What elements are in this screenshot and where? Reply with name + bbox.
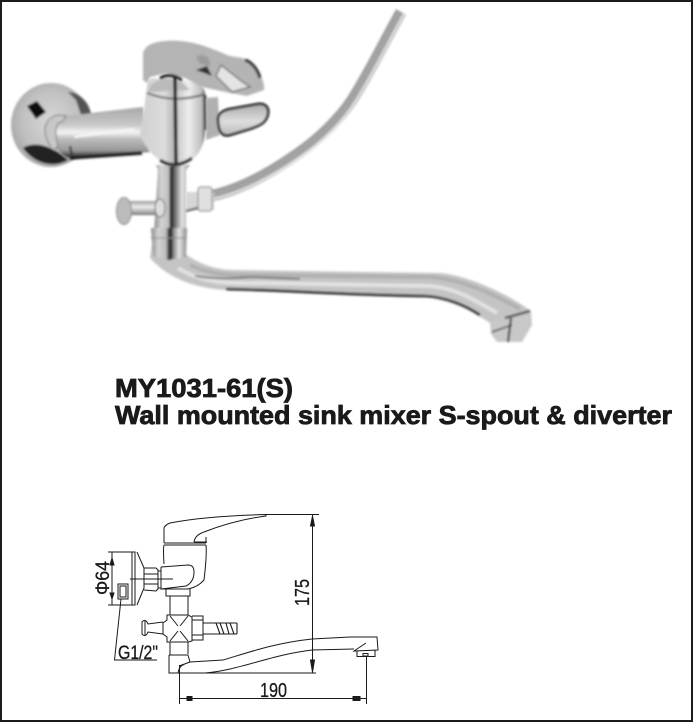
label: G1/2 thread: G1/2" [118, 643, 158, 664]
dimension: height 175 [266, 514, 319, 673]
wall flange [11, 83, 91, 167]
drawing: lever handle [164, 514, 266, 543]
drawing: G1/2 port [114, 584, 157, 660]
spout [150, 246, 532, 342]
drawing: spout elbow [169, 637, 378, 673]
faucet product photo [11, 12, 532, 342]
drawing: diverter cross [163, 615, 192, 642]
diverter column [151, 165, 190, 260]
drawing: thread hatching [214, 623, 237, 634]
dimension: diameter 64 [93, 552, 114, 605]
dimension label: 175: 175 [292, 579, 314, 606]
drawing: diverter knob [142, 620, 163, 636]
dimension label: Φ64: Φ64 [93, 561, 114, 595]
wall arm [45, 107, 150, 158]
drawing: aerator [357, 650, 375, 656]
lever handle [143, 41, 264, 96]
drawing: wall flange and nut [108, 552, 161, 605]
hose connector [186, 187, 214, 211]
drawing: centre line [130, 578, 173, 580]
shower hose [210, 12, 404, 199]
drawing: threaded connector [192, 616, 214, 640]
mixer body [140, 76, 206, 165]
diverter knob [116, 198, 165, 224]
dimension label: 190: 190 [260, 680, 287, 702]
product description: Wall mounted sink mixer S-spout & diverter [115, 400, 672, 430]
technical line drawing [93, 514, 378, 704]
side oval lever [206, 97, 268, 140]
dimension: width 190 [180, 656, 366, 704]
product title [115, 373, 672, 430]
drawing: diverter column [170, 596, 188, 655]
model number: MY1031-61(S) [115, 373, 293, 403]
drawing: mixer body [161, 545, 206, 596]
